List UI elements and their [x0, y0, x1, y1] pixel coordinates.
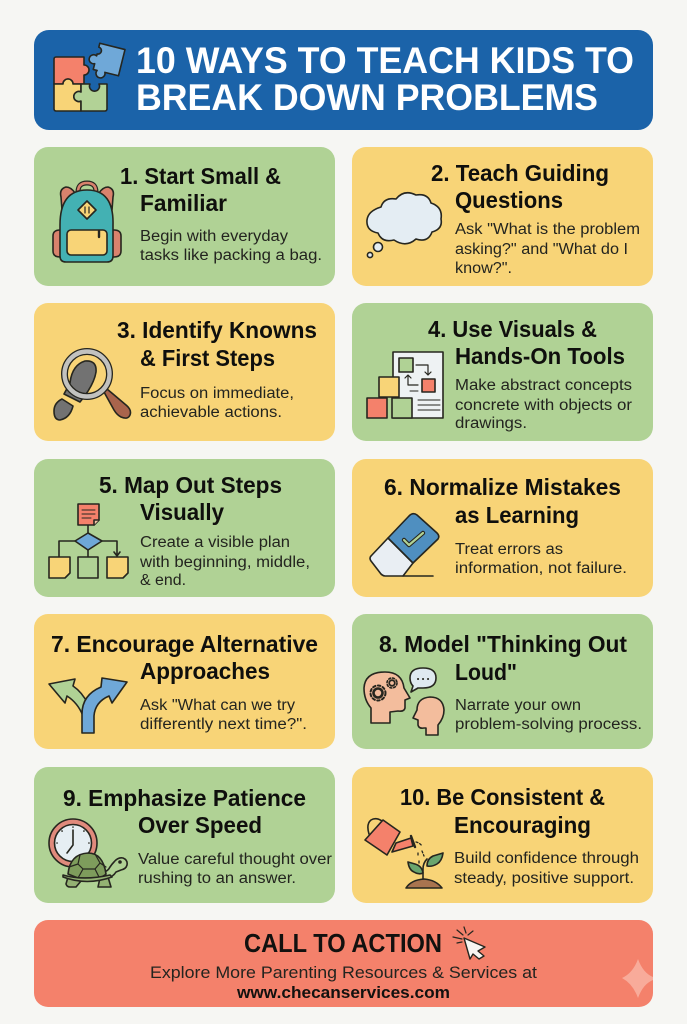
header banner [34, 30, 653, 130]
heading: 5. Map Out Steps [99, 472, 282, 498]
body text: achievable actions. [140, 404, 282, 421]
panel: card 5 map steps: Visually [140, 499, 224, 525]
body text: problem-solving process. [455, 716, 642, 733]
panel: card 2 guiding questions [352, 147, 653, 286]
body text [139, 534, 310, 589]
body text: Create a visible plan [140, 534, 290, 551]
heading: 9. Emphasize Patience [63, 785, 306, 811]
icon: cursor click [453, 927, 485, 959]
panel: card 1 start small: Familiar [140, 190, 227, 216]
title [136, 40, 634, 118]
website link: www.checanservices.com [236, 983, 450, 1002]
panel: card 6 normalize mistakes: as Learning [455, 502, 579, 528]
icon: flowchart [49, 504, 128, 578]
body text: Ask "What is the problem [455, 221, 640, 238]
icon: watering can and seedling [365, 819, 443, 888]
body text [140, 385, 294, 421]
icon: backpack [53, 183, 121, 262]
icon: clock and turtle [49, 819, 127, 887]
panel: card 3 knowns and first steps [34, 303, 335, 441]
body text: Value careful thought over [138, 851, 332, 868]
panel: card 8 thinking out loud [352, 614, 653, 749]
icon: forking arrows [49, 678, 127, 733]
icon: sparkle [622, 959, 653, 998]
body text: Build confidence through [454, 850, 639, 867]
panel: card 10 consistent: Encouraging [454, 812, 591, 838]
panel: card 6 normalize mistakes [352, 459, 653, 597]
body text: Begin with everyday [140, 228, 288, 245]
heading: 4. Use Visuals & [428, 316, 597, 342]
panel: card 9 patience [34, 767, 335, 903]
body text [140, 697, 307, 733]
heading: CALL TO ACTION [244, 928, 442, 958]
panel: card 4 visuals and tools: Hands-On Tools [455, 343, 625, 369]
body text: with beginning, middle, [139, 554, 310, 571]
panel: card 1 start small [34, 147, 335, 286]
heading: 1. Start Small & [120, 163, 281, 189]
panel: card 5 map steps [34, 459, 335, 597]
panel: card 2 guiding questions: Questions [455, 187, 563, 213]
body text [455, 697, 642, 733]
body text: Make abstract concepts [455, 377, 632, 394]
body text: information, not failure. [455, 560, 627, 577]
body text: differently next time?". [140, 716, 307, 733]
panel: card 10 consistent [352, 767, 653, 903]
heading: 7. Encourage Alternative [51, 631, 318, 657]
body text: rushing to an answer. [138, 870, 296, 887]
body text [455, 541, 627, 577]
body text [138, 851, 332, 887]
icon: blocks and diagram sheet [367, 352, 443, 418]
heading: 6. Normalize Mistakes [384, 474, 621, 500]
body text: Narrate your own [455, 697, 581, 714]
body text: steady, positive support. [454, 870, 634, 887]
body text: Ask "What can we try [140, 697, 295, 714]
icon: eraser with check [370, 514, 439, 576]
heading: 8. Model "Thinking Out [379, 631, 627, 657]
panel: card 7 alternative approaches [34, 614, 335, 749]
body text: tasks like packing a bag. [140, 247, 322, 264]
panel: card 4 visuals and tools [352, 303, 653, 441]
body text: drawings. [455, 415, 527, 432]
title: 10 WAYS TO TEACH KIDS TO [136, 40, 634, 81]
body text: asking?" and "What do I [455, 241, 628, 258]
body text: Explore More Parenting Resources & Services at [150, 963, 537, 982]
heading: 3. Identify Knowns [117, 317, 317, 343]
title: BREAK DOWN PROBLEMS [136, 77, 598, 118]
icon: puzzle pieces [54, 42, 125, 111]
icon: heads with gears and speech [364, 668, 444, 735]
body text: Treat errors as [455, 541, 563, 558]
body text: Focus on immediate, [140, 385, 294, 402]
panel: call to action [34, 920, 653, 1007]
icon: thought cloud [367, 193, 441, 258]
heading: 2. Teach Guiding [431, 160, 609, 186]
body text [455, 221, 640, 277]
panel: card 3 knowns and first steps: & First Steps [140, 345, 275, 371]
body text [454, 850, 639, 887]
heading: 10. Be Consistent & [400, 784, 605, 810]
body text: & end. [140, 572, 186, 589]
body text [140, 228, 322, 264]
panel: card 7 alternative approaches: Approaches [140, 658, 270, 684]
body text [455, 377, 632, 432]
body text: concrete with objects or [455, 397, 632, 414]
icon: magnifier over footprint [54, 352, 130, 420]
panel: card 9 patience: Over Speed [138, 812, 262, 838]
panel: card 8 thinking out loud: Loud" [455, 659, 517, 685]
body text: know?". [455, 260, 512, 277]
